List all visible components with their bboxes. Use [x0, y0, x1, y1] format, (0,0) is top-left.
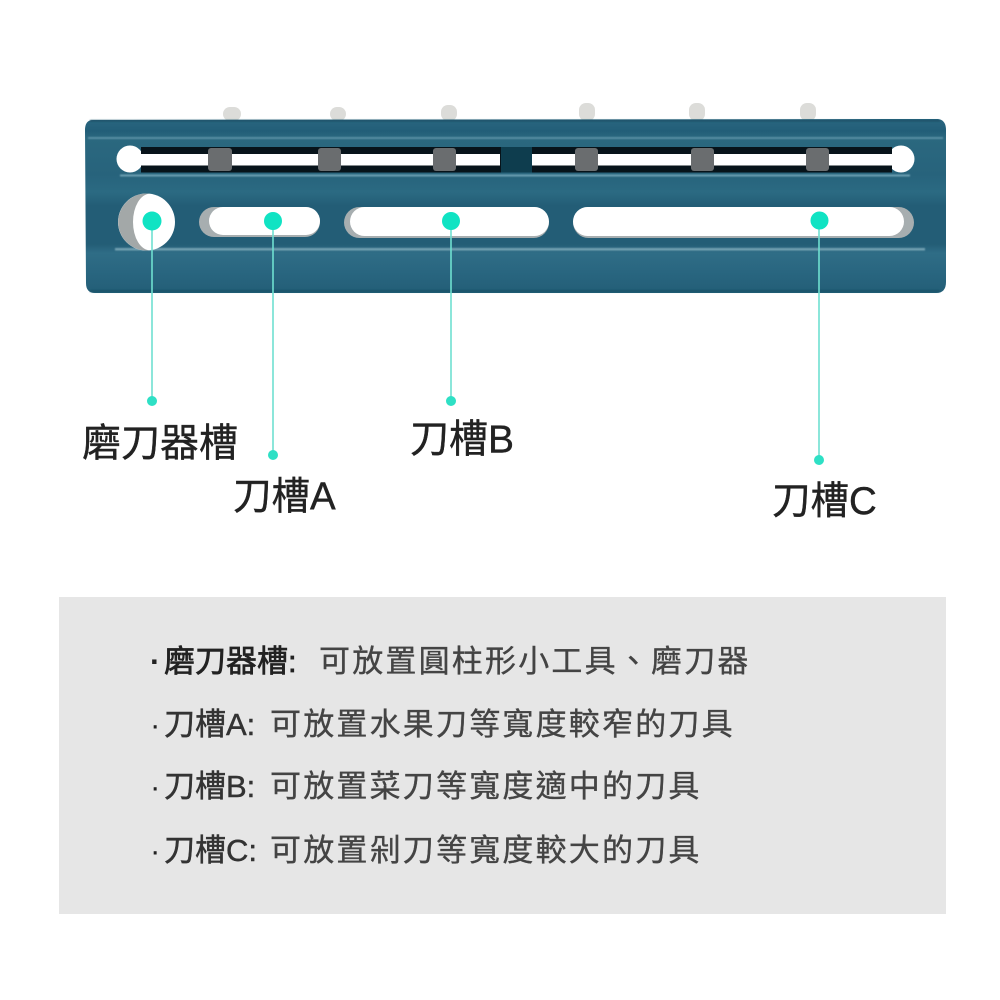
label: slot C: 刀槽C	[772, 480, 877, 523]
bar body	[85, 119, 946, 293]
sharpener slot hole	[118, 194, 175, 250]
description: slot B: 可放置菜刀等寬度適中的刀具	[270, 769, 702, 804]
knife slot A hole	[199, 207, 320, 237]
callout lines and markers	[142, 212, 828, 465]
description: slot C: ·	[150, 833, 160, 868]
sliders	[208, 148, 829, 171]
top slot	[116, 146, 914, 172]
description: sharpener slot: 磨刀器槽:	[164, 644, 297, 679]
description: slot B: ·	[150, 769, 160, 804]
description: slot C: 刀槽C:	[164, 833, 257, 868]
description: sharpener slot: 可放置圓柱形小工具、磨刀器	[319, 644, 751, 679]
product: knife rack bar	[85, 103, 946, 293]
description: slot A: 刀槽A:	[164, 707, 255, 742]
panel: slot descriptions	[59, 597, 946, 914]
description: sharpener slot: ·	[150, 644, 160, 679]
bar highlights	[88, 120, 943, 292]
knife pins on top	[223, 103, 816, 121]
description: slot C: 可放置剁刀等寬度較大的刀具	[270, 833, 702, 868]
knife slot B hole	[344, 207, 549, 238]
knife slot C hole	[573, 207, 914, 238]
description: slot A: ·	[150, 707, 160, 742]
text block: slot descriptions	[150, 644, 751, 868]
label: slot B: 刀槽B	[410, 418, 514, 462]
label: sharpener slot: 磨刀器槽	[82, 422, 238, 466]
label: slot A: 刀槽A	[233, 476, 336, 518]
description: slot A: 可放置水果刀等寬度較窄的刀具	[270, 707, 735, 742]
description: slot B: 刀槽B:	[164, 769, 255, 804]
